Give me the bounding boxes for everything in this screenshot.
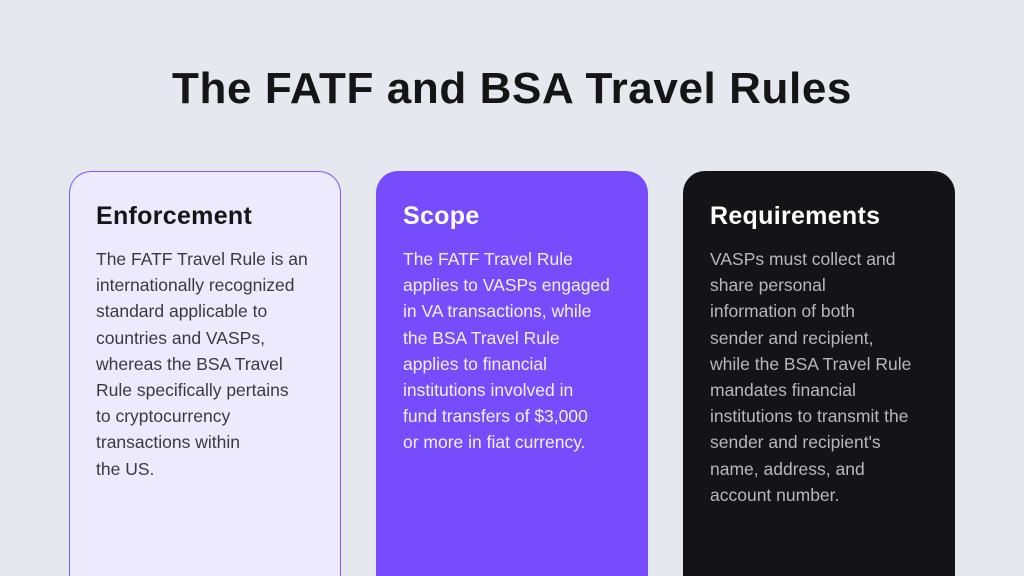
panel: enforcement <box>69 171 341 576</box>
panel: scope <box>376 171 648 576</box>
text: enforcement: whereas the BSA Travel <box>96 354 283 374</box>
heading: requirements: Requirements <box>710 202 880 230</box>
text: scope: the BSA Travel Rule <box>403 328 560 348</box>
text: enforcement: countries and VASPs, <box>96 328 265 348</box>
text: enforcement: to cryptocurrency <box>96 406 230 426</box>
text: scope: fund transfers of $3,000 <box>403 406 588 426</box>
text: scope: or more in fiat currency. <box>403 432 586 452</box>
text: scope: applies to VASPs engaged <box>403 275 610 295</box>
text: requirements: institutions to transmit the <box>710 406 908 426</box>
text: scope: The FATF Travel Rule <box>403 249 573 269</box>
text: enforcement <box>96 249 308 479</box>
text: requirements <box>710 249 911 505</box>
text: scope: applies to financial <box>403 354 547 374</box>
text: enforcement: the US. <box>96 459 154 479</box>
text: requirements: sender and recipient's <box>710 432 881 452</box>
text: requirements: information of both <box>710 301 855 321</box>
text: scope: institutions involved in <box>403 380 573 400</box>
text: requirements: while the BSA Travel Rule <box>710 354 911 374</box>
title: The FATF and BSA Travel Rules <box>172 64 852 113</box>
text: requirements: share personal <box>710 275 826 295</box>
text: enforcement: standard applicable to <box>96 301 267 321</box>
heading: enforcement: Enforcement <box>96 202 252 230</box>
text: enforcement: transactions within <box>96 432 240 452</box>
text: enforcement: internationally recognized <box>96 275 294 295</box>
text: requirements: sender and recipient, <box>710 328 873 348</box>
heading: scope: Scope <box>403 202 480 230</box>
text: scope <box>403 249 610 452</box>
text: enforcement: The FATF Travel Rule is an <box>96 249 308 269</box>
text: requirements: VASPs must collect and <box>710 249 895 269</box>
text: requirements: account number. <box>710 485 839 505</box>
panel: requirements <box>683 171 955 576</box>
text: requirements: name, address, and <box>710 459 865 479</box>
text: enforcement: Rule specifically pertains <box>96 380 289 400</box>
text: scope: in VA transactions, while <box>403 301 591 321</box>
text: requirements: mandates financial <box>710 380 856 400</box>
